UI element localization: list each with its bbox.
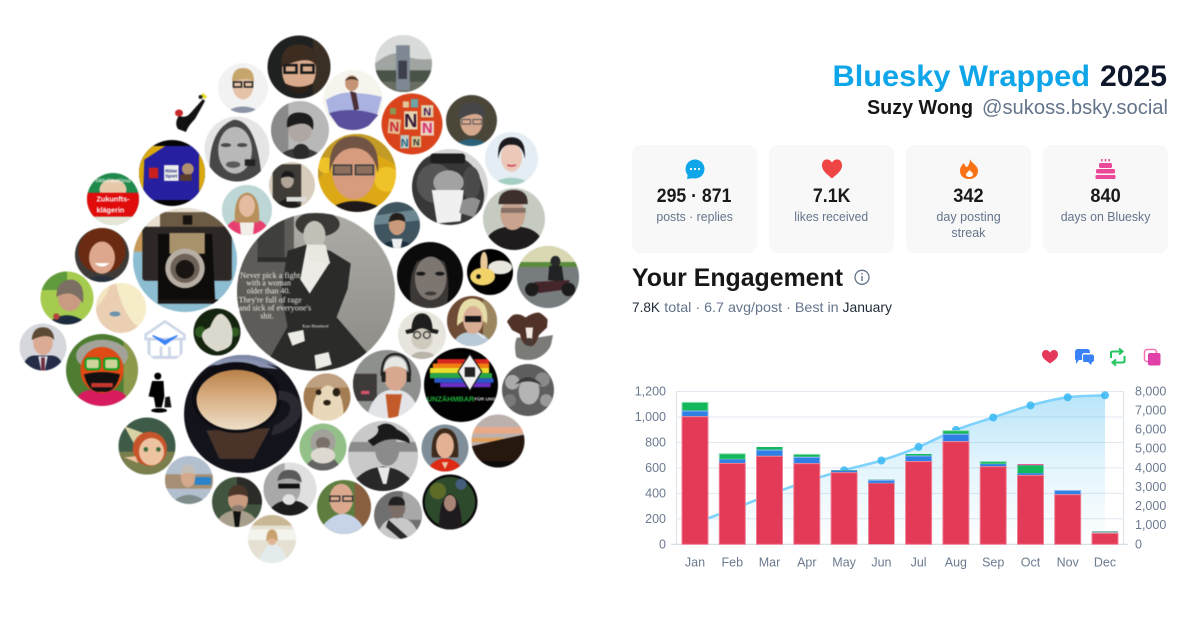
month labels: Jun — [871, 556, 892, 570]
heading: Your Engagement: Your Engagement — [632, 264, 844, 292]
avatar: old man in bowler hat, drawn — [398, 310, 446, 360]
avatar: blonde woman with sunglasses and cigarette — [446, 295, 498, 346]
avatar: vintage folding camera — [132, 208, 238, 313]
stat card: likes received: 7.1K — [813, 186, 851, 207]
bar: April — [794, 454, 820, 544]
avatar: man with grey hair and glasses — [445, 94, 498, 147]
title: 2025 — [1100, 60, 1167, 93]
icon: likes heart — [1042, 350, 1058, 364]
engagement summary: total · 6.7 avg/post · Best in — [664, 299, 839, 315]
avatar: woman's face in the dark — [396, 241, 464, 309]
avatar: man with glasses and yellow foliage — [317, 133, 397, 213]
avatar: red haired elf — [118, 416, 176, 476]
avatar: grey haired woman at a car park — [164, 456, 214, 505]
bar: October — [1018, 464, 1044, 544]
bar: May — [831, 470, 857, 544]
combined bar and line chart: monthly engagement — [635, 384, 1166, 570]
engagement summary: January — [842, 299, 892, 315]
right axis labels: 4,000 — [1135, 461, 1166, 475]
avatar: bank building mail icon — [144, 320, 186, 360]
avatar: cup of coffee — [183, 354, 303, 474]
right axis labels: 2,000 — [1135, 499, 1166, 513]
avatar: letter N blocks on orange: N — [389, 119, 399, 134]
cumulative line — [695, 395, 1105, 523]
avatar: main quote portrait: with a woman — [246, 279, 291, 288]
avatar: man with glasses, pale background — [218, 63, 268, 114]
icon: replies chat — [1075, 349, 1094, 365]
bar: June — [868, 479, 894, 544]
avatar: AlleFürsKlima Zukunftsklägerin badge: Zukunfts- — [96, 195, 130, 204]
cumulative line points — [691, 391, 1109, 527]
month labels: Dec — [1094, 556, 1116, 570]
month labels: Nov — [1057, 556, 1080, 570]
avatar: sunset over trees — [470, 414, 526, 468]
right axis labels: 6,000 — [1135, 423, 1166, 437]
avatar: letter N blocks on orange — [380, 92, 444, 156]
avatar: letter N blocks on orange: N — [413, 137, 420, 147]
avatar: main quote portrait — [236, 212, 396, 372]
avatar: man with sunglasses, black and white — [263, 462, 317, 516]
avatar: curly haired woman, black and white — [501, 363, 555, 417]
month labels: Apr — [797, 556, 817, 570]
stat card: posts and replies: 295 · 871 — [657, 186, 732, 207]
cumulative area — [695, 395, 1105, 544]
left axis labels: 200 — [645, 512, 666, 526]
user name and handle: Suzy Wong — [867, 97, 973, 119]
avatar: meerkat — [302, 372, 352, 421]
avatar: grey haired woman on green — [40, 270, 94, 326]
avatar: main quote portrait: Never pick a fight — [240, 271, 301, 280]
avatar: main quote portrait: Kate Blumberd — [302, 323, 329, 328]
month labels: Aug — [945, 556, 967, 570]
stat card: day posting streak: streak — [951, 226, 986, 240]
avatar: Ritter Sport chocolate bar: Sport — [165, 174, 178, 179]
avatar: Karl Marx on green — [298, 422, 348, 472]
avatar: main quote portrait: shit. — [260, 311, 274, 320]
icon: info — [855, 270, 869, 284]
stat card: day posting streak: 342 — [953, 186, 984, 207]
avatar: Ritter Sport chocolate bar: Ritter — [165, 168, 178, 173]
left axis labels: 1,000 — [635, 410, 666, 424]
avatar: main quote portrait: older than 40. — [247, 287, 290, 296]
engagement summary — [632, 299, 892, 315]
avatar: curly haired person drinking from white cup — [411, 148, 488, 226]
avatar: cutiefly creature on black — [466, 248, 514, 296]
avatar: orange muppet with green glasses — [65, 333, 139, 407]
bar: January — [682, 402, 708, 544]
avatar: reclining man with tie — [323, 70, 383, 131]
bar: November — [1055, 490, 1081, 544]
avatar: man in hat, black and white — [348, 420, 418, 492]
avatar: old woman with headscarf — [204, 116, 270, 182]
month labels: May — [832, 556, 857, 570]
avatar: Berlin wall segment — [374, 34, 432, 93]
title: Bluesky Wrapped — [832, 60, 1090, 93]
avatar: woman with dark hair, pale background — [484, 132, 538, 186]
bar: August — [943, 431, 969, 544]
icon: birthday cake — [1096, 159, 1116, 179]
stat card: posts and replies: posts · replies — [656, 210, 733, 224]
month labels — [685, 556, 1116, 570]
avatar: vintage photo of man — [268, 162, 316, 209]
avatar: close-up blonde with eye — [96, 282, 146, 334]
right axis labels: 7,000 — [1135, 404, 1166, 418]
avatar: bearded musician, black and white — [373, 490, 422, 540]
left axis labels: 0 — [659, 537, 666, 551]
avatar: flower thrower silhouette — [174, 92, 208, 133]
avatar: letter N blocks on orange: N — [401, 138, 409, 150]
right axis labels: 8,000 — [1135, 384, 1166, 398]
avatar: bald man with glasses, green background — [316, 479, 372, 534]
avatar: woman in red blazer — [420, 424, 470, 472]
chart grid — [671, 392, 1128, 544]
right axis labels: 3,000 — [1135, 480, 1166, 494]
avatar: letter N blocks on orange: N — [422, 121, 433, 137]
month labels: Sep — [982, 556, 1004, 570]
avatar: Borussia rainbow logo: FÜR UNS — [474, 396, 496, 403]
month labels: Feb — [722, 556, 743, 570]
engagement summary: 7.8K — [632, 299, 661, 315]
avatar: woman in black and white, grey room — [270, 100, 330, 160]
avatar: man in tan jacket — [211, 476, 263, 528]
avatar: man in navy jacket — [373, 201, 421, 249]
avatar: motorcycle rider — [516, 246, 580, 309]
stat card: likes received: likes received — [794, 210, 868, 224]
left axis labels: 600 — [645, 461, 666, 475]
stat card: day posting streak — [906, 145, 1031, 253]
avatar: AlleFürsKlima Zukunftsklägerin badge: klägerin — [96, 206, 124, 215]
avatar: letter N blocks on orange: N — [423, 106, 431, 118]
avatar: AlleFürsKlima Zukunftsklägerin badge: #AlleFürsKlima — [96, 178, 131, 184]
avatar: main quote portrait: and sick of everyone's — [239, 303, 311, 312]
month labels: Jan — [685, 556, 705, 570]
user name and handle — [867, 97, 1168, 119]
avatar: woman in light room — [248, 514, 296, 564]
stat card: days on Bluesky: 840 — [1090, 186, 1121, 207]
avatar: woman in forest with dark ring — [422, 474, 478, 530]
icon: heart — [822, 159, 842, 178]
stat card: posts and replies — [632, 145, 757, 253]
left axis labels: 400 — [645, 486, 666, 500]
right axis labels — [1135, 384, 1166, 551]
stat card: days on Bluesky — [1043, 145, 1168, 253]
icon: flame — [960, 159, 978, 179]
left axis labels: 800 — [645, 436, 666, 450]
avatar: letter N blocks on orange: N — [404, 110, 417, 131]
month labels: Mar — [759, 556, 780, 570]
icon: quotes squares — [1144, 350, 1160, 366]
avatar: man in suit — [19, 323, 67, 372]
right axis labels: 1,000 — [1135, 518, 1166, 532]
avatar cluster — [20, 35, 579, 563]
bar: July — [906, 454, 932, 544]
left axis labels: 1,200 — [635, 384, 666, 398]
avatar: AlleFürsKlima Zukunftsklägerin badge — [86, 172, 140, 226]
user name and handle: @sukoss.bsky.social — [982, 97, 1168, 119]
avatar: woman with curly red hair — [74, 227, 130, 283]
month labels: Oct — [1021, 556, 1041, 570]
bar: March — [756, 447, 782, 544]
stacked bars — [682, 402, 1118, 544]
avatar: brown and white dog — [506, 312, 554, 361]
stat card: likes received — [769, 145, 894, 253]
avatar: white stone heart — [192, 308, 242, 356]
avatar: man in black cap and t-shirt — [482, 188, 546, 251]
bar: September — [980, 462, 1006, 544]
avatar: bearded man with glasses, dark background — [266, 34, 332, 100]
avatar: older man with headphones and scarf — [352, 349, 422, 419]
avatar: Borussia rainbow logo: UNZÄHMBAR — [427, 394, 475, 403]
chart legend icons — [1042, 348, 1160, 366]
stat card: day posting streak: day posting — [936, 210, 1001, 224]
right axis labels: 5,000 — [1135, 442, 1166, 456]
left axis labels — [635, 384, 666, 551]
avatar: Ritter Sport chocolate bar — [138, 139, 206, 207]
month labels: Jul — [911, 556, 927, 570]
icon: chat bubble — [686, 160, 704, 179]
bar: December — [1092, 531, 1118, 544]
avatar: Borussia rainbow logo — [423, 347, 499, 423]
bar: February — [719, 454, 745, 544]
avatar: silhouette with dog — [148, 372, 172, 414]
avatar: main quote portrait: They're full of rage — [239, 295, 302, 304]
stat card: days on Bluesky: days on Bluesky — [1061, 210, 1151, 224]
right axis labels: 0 — [1135, 537, 1142, 551]
icon: reposts arrows — [1111, 348, 1124, 366]
avatar: blonde woman in pink blazer — [222, 184, 272, 236]
